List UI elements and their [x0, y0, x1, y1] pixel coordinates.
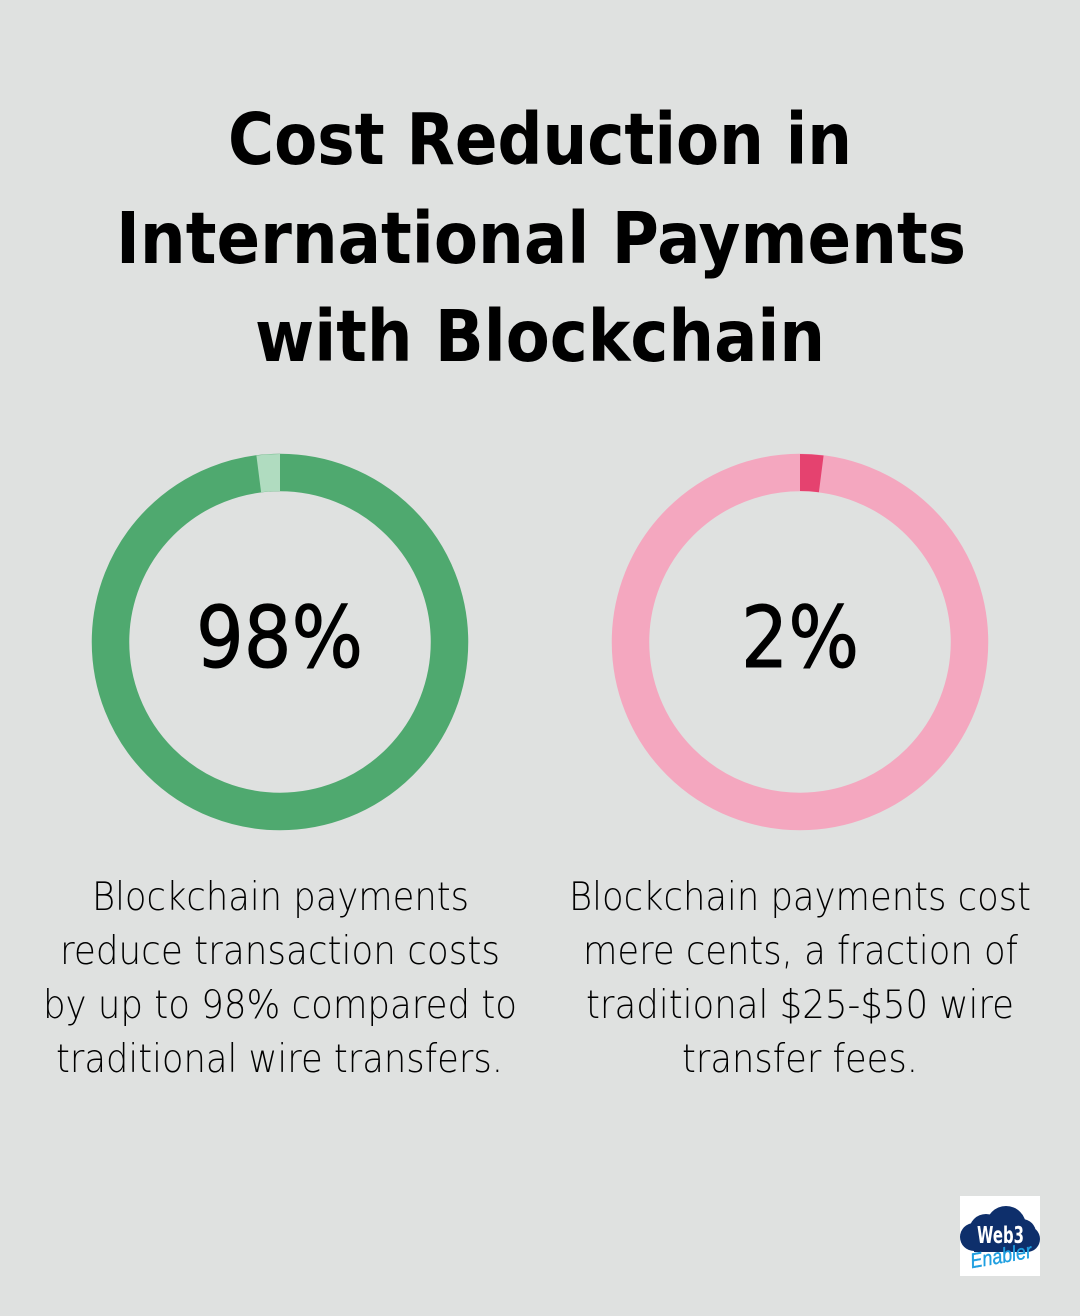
description: 98%: traditional wire transfers.	[56, 1036, 503, 1082]
title: Cost Reduction in	[228, 98, 852, 181]
donut chart: 2%	[630, 454, 970, 812]
title: International Payments	[116, 197, 966, 280]
description: 2%: traditional $25-$50 wire	[586, 982, 1014, 1028]
panel: 98% cost reduction	[43, 454, 517, 1082]
description: 98%: by up to 98% compared to	[43, 982, 517, 1028]
title	[116, 98, 966, 378]
number: 98%: 98%	[196, 589, 363, 688]
donut chart: 98%	[110, 454, 450, 812]
description: 2%	[569, 874, 1031, 1082]
icon: cloud	[960, 1206, 1040, 1252]
description: 2%: Blockchain payments cost	[569, 874, 1031, 920]
number: 2%: 2%	[741, 589, 859, 688]
logo wordmark: Web3: Web3	[977, 1223, 1024, 1249]
description: 2%: mere cents, a fraction of	[583, 928, 1018, 974]
description: 98%: reduce transaction costs	[60, 928, 500, 974]
panel: 2% remaining cost	[569, 454, 1031, 1082]
title: with Blockchain	[255, 295, 825, 378]
description: 98%	[43, 874, 517, 1082]
logo wordmark: Enabler: Enabler	[969, 1240, 1034, 1273]
description: 2%: transfer fees.	[682, 1036, 918, 1082]
logo: Web3 Enabler	[960, 1196, 1040, 1276]
description: 98%: Blockchain payments	[92, 874, 469, 920]
